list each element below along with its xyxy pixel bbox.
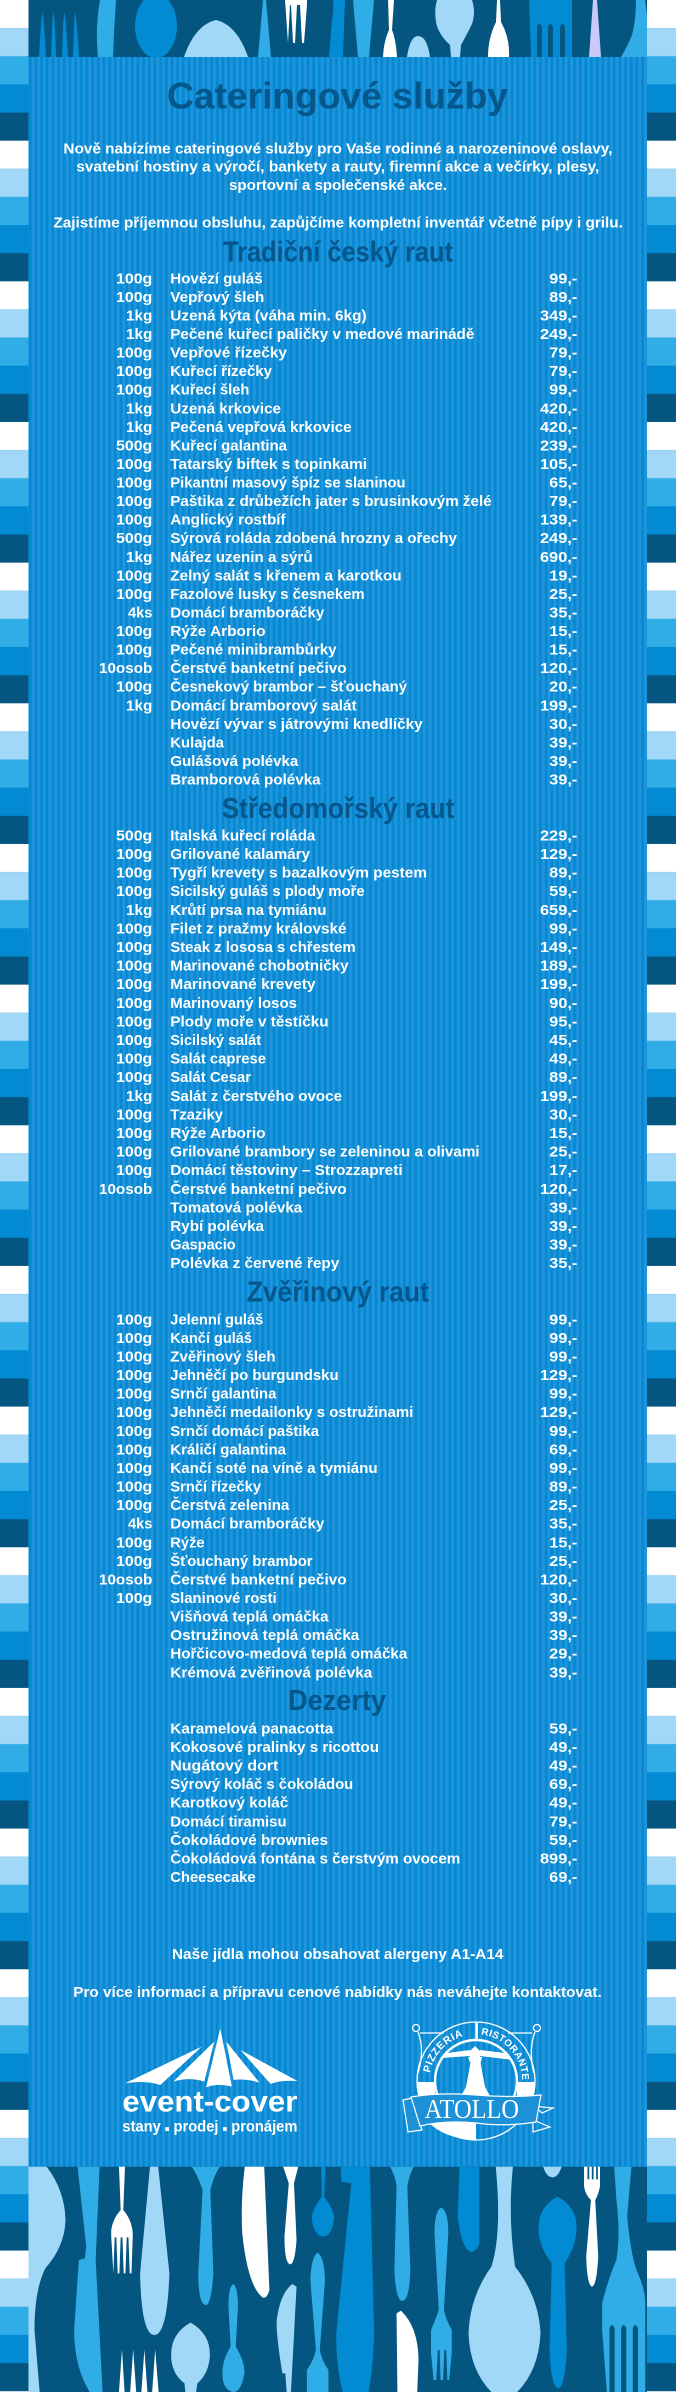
menu list: Zvěřinový raut: 25,-: [549, 1553, 577, 1570]
menu list: Tradiční český raut: Vepřové řízečky: [170, 345, 288, 362]
menu list: Tradiční český raut: 120,-: [540, 660, 577, 677]
menu list: Tradiční český raut: 1kg: [126, 419, 152, 436]
menu list: Dezerty: 49,-: [549, 1795, 577, 1812]
menu list: Zvěřinový raut: 129,-: [540, 1404, 577, 1421]
menu list: Zvěřinový raut: Krémová zvěřinová polévka: [170, 1664, 373, 1681]
menu list: Tradiční český raut: Sýrová roláda zdobená hrozny a ořechy: [170, 530, 458, 547]
menu list: Zvěřinový raut: 99,-: [549, 1311, 577, 1328]
menu list: Středomořský raut: Salát Cesar: [170, 1069, 251, 1086]
menu list: Tradiční český raut: 100g: [116, 679, 152, 696]
menu list: Středomořský raut: 149,-: [540, 939, 577, 956]
menu list: Tradiční český raut: [99, 270, 577, 789]
menu list: Středomořský raut: Filet z pražmy královské: [170, 920, 347, 937]
menu list: Středomořský raut: Salát caprese: [170, 1051, 266, 1068]
menu list: Zvěřinový raut: Jehněčí po burgundsku: [170, 1367, 339, 1384]
menu list: Středomořský raut: 659,-: [540, 902, 577, 919]
menu list: Středomořský raut: 100g: [116, 920, 152, 937]
menu list: Zvěřinový raut: 4ks: [128, 1516, 152, 1533]
menu list: Tradiční český raut: 105,-: [540, 456, 577, 473]
menu list: Tradiční český raut: 25,-: [549, 586, 577, 603]
menu list: Dezerty: 79,-: [549, 1813, 577, 1830]
menu list: Středomořský raut: Rýže Arborio: [170, 1125, 266, 1142]
menu list: Tradiční český raut: 100g: [116, 623, 152, 640]
menu list: Středomořský raut: Marinovaný losos: [170, 995, 297, 1012]
menu list: Středomořský raut: Tzaziky: [170, 1106, 224, 1123]
menu list: Středomořský raut: Steak z lososa s chřestem: [170, 939, 356, 956]
menu list: Zvěřinový raut: 99,-: [549, 1386, 577, 1403]
menu list: Tradiční český raut: 500g: [116, 437, 152, 454]
menu list: Zvěřinový raut: 15,-: [549, 1534, 577, 1551]
menu list: Středomořský raut: 199,-: [540, 976, 577, 993]
menu list: Tradiční český raut: 100g: [116, 586, 152, 603]
menu list: Tradiční český raut: 30,-: [549, 716, 577, 733]
menu list: Dezerty: 59,-: [549, 1832, 577, 1849]
menu list: Tradiční český raut: 79,-: [549, 493, 577, 510]
menu list: Zvěřinový raut: 35,-: [549, 1516, 577, 1533]
menu list: Středomořský raut: 229,-: [540, 827, 577, 844]
menu list: Tradiční český raut: 100g: [116, 493, 152, 510]
heading: Tradiční český raut: Tradiční český raut: [223, 237, 453, 269]
intro text: sportovní a společenské akce.: [229, 177, 447, 194]
menu list: Středomořský raut: 89,-: [549, 865, 577, 882]
allergen note: Naše jídla mohou obsahovat alergeny A1-A14: [172, 1946, 504, 1963]
menu list: Tradiční český raut: Vepřový šleh: [170, 289, 264, 306]
menu list: Tradiční český raut: 89,-: [549, 289, 577, 306]
menu list: Tradiční český raut: 249,-: [540, 530, 577, 547]
menu list: Středomořský raut: 100g: [116, 1125, 152, 1142]
menu list: Středomořský raut: 39,-: [549, 1218, 577, 1235]
menu list: Tradiční český raut: Domácí bramborový salát: [170, 697, 357, 714]
menu list: Středomořský raut: Grilované kalamáry: [170, 846, 311, 863]
menu list: Tradiční český raut: 15,-: [549, 642, 577, 659]
menu list: Zvěřinový raut: Srnčí řízečky: [170, 1478, 262, 1496]
menu list: Tradiční český raut: 20,-: [549, 679, 577, 696]
menu list: Tradiční český raut: 100g: [116, 289, 152, 306]
menu list: Tradiční český raut: 65,-: [549, 474, 577, 492]
menu list: Tradiční český raut: 239,-: [540, 437, 577, 454]
menu list: Tradiční český raut: 420,-: [540, 400, 577, 417]
menu list: Středomořský raut: 10osob: [99, 1181, 152, 1198]
menu list: Středomořský raut: Gaspacio: [170, 1237, 236, 1254]
right side stripes: [647, 0, 676, 2392]
logo: Atollo: ATOLLO: [425, 2094, 519, 2124]
menu list: Středomořský raut: 100g: [116, 865, 152, 882]
menu list: Dezerty: Domácí tiramisu: [170, 1813, 287, 1830]
contact note: Pro více informací a přípravu cenové nabídky nás neváhejte kontaktovat.: [73, 1984, 602, 2001]
menu list: Středomořský raut: 100g: [116, 846, 152, 863]
menu list: Tradiční český raut: Bramborová polévka: [170, 772, 321, 789]
menu list: Tradiční český raut: Zelný salát s křenem a karotkou: [170, 567, 402, 584]
menu list: Tradiční český raut: 99,-: [549, 382, 577, 399]
menu list: Středomořský raut: 1kg: [126, 902, 152, 919]
menu list: Zvěřinový raut: Kančí guláš: [170, 1330, 252, 1347]
menu list: Tradiční český raut: Domácí bramboráčky: [170, 604, 325, 622]
menu list: Středomořský raut: 99,-: [549, 920, 577, 937]
ring text: ristorante: [481, 2034, 522, 2086]
menu list: Tradiční český raut: 1kg: [126, 549, 152, 566]
menu list: Tradiční český raut: 100g: [116, 363, 152, 380]
menu list: Zvěřinový raut: Kančí soté na víně a tymiánu: [170, 1460, 378, 1477]
menu list: Zvěřinový raut: 100g: [116, 1460, 152, 1477]
menu list: Tradiční český raut: 39,-: [549, 753, 577, 770]
menu list: Tradiční český raut: 1kg: [126, 400, 152, 417]
menu list: Středomořský raut: 35,-: [549, 1255, 577, 1272]
menu list: Tradiční český raut: 420,-: [540, 419, 577, 436]
menu list: Tradiční český raut: 19,-: [549, 567, 577, 584]
menu list: Středomořský raut: 100g: [116, 1106, 152, 1123]
menu list: Zvěřinový raut: 100g: [116, 1534, 152, 1551]
menu list: Tradiční český raut: Fazolové lusky s česnekem: [170, 586, 365, 603]
menu list: Středomořský raut: 100g: [116, 1144, 152, 1161]
logo: event-cover: stany ■ prodej ■ pronájem: [122, 2119, 297, 2136]
menu list: Středomořský raut: 15,-: [549, 1125, 577, 1142]
menu list: Dezerty: Sýrový koláč s čokoládou: [170, 1776, 353, 1793]
left side stripes: [0, 0, 28, 2392]
menu list: Středomořský raut: Italská kuřecí roláda: [170, 827, 316, 844]
menu list: Tradiční český raut: Kulajda: [170, 734, 225, 751]
menu list: Středomořský raut: 100g: [116, 883, 152, 900]
menu list: Středomořský raut: Sicilský salát: [170, 1032, 261, 1049]
menu list: Tradiční český raut: 4ks: [128, 604, 152, 622]
menu list: Zvěřinový raut: 100g: [116, 1497, 152, 1514]
menu list: Zvěřinový raut: Čerstvá zelenina: [170, 1496, 290, 1514]
menu list: Tradiční český raut: Čerstvé banketní pečivo: [170, 659, 347, 677]
menu list: Zvěřinový raut: Srnčí galantina: [170, 1386, 277, 1403]
menu list: Zvěřinový raut: Domácí bramboráčky: [170, 1516, 325, 1533]
bottom cutlery band: [28, 2167, 647, 2392]
menu list: Středomořský raut: 100g: [116, 1069, 152, 1086]
menu list: Tradiční český raut: Uzená krkovice: [170, 400, 281, 417]
menu list: Středomořský raut: 25,-: [549, 1144, 577, 1161]
menu list: Středomořský raut: 17,-: [549, 1162, 577, 1179]
menu list: Zvěřinový raut: 39,-: [549, 1627, 577, 1644]
menu list: Tradiční český raut: 100g: [116, 512, 152, 529]
menu list: Tradiční český raut: 139,-: [540, 512, 577, 529]
menu list: Středomořský raut: 59,-: [549, 883, 577, 900]
menu list: Dezerty: 69,-: [549, 1869, 577, 1886]
menu list: Dezerty: [170, 1720, 577, 1886]
menu list: Zvěřinový raut: 100g: [116, 1478, 152, 1496]
menu list: Středomořský raut: 100g: [116, 1162, 152, 1179]
menu list: Středomořský raut: 39,-: [549, 1199, 577, 1216]
menu list: Středomořský raut: 100g: [116, 939, 152, 956]
menu list: Tradiční český raut: Uzená kýta (váha min. 6kg): [170, 307, 367, 324]
menu list: Středomořský raut: 100g: [116, 1032, 152, 1049]
menu list: Zvěřinový raut: 99,-: [549, 1348, 577, 1366]
menu list: Zvěřinový raut: 25,-: [549, 1497, 577, 1514]
menu list: Zvěřinový raut: Srnčí domácí paštika: [170, 1423, 320, 1440]
menu list: Tradiční český raut: 100g: [116, 567, 152, 584]
menu list: Zvěřinový raut: Šťouchaný brambor: [170, 1552, 313, 1570]
menu list: Tradiční český raut: Paštika z drůbežích jater s brusinkovým želé: [170, 493, 492, 510]
menu list: Zvěřinový raut: 100g: [116, 1330, 152, 1347]
menu list: Středomořský raut: Grilované brambory se zeleninou a olivami: [170, 1144, 480, 1161]
menu list: Tradiční český raut: 39,-: [549, 772, 577, 789]
menu list: Zvěřinový raut: 99,-: [549, 1460, 577, 1477]
menu list: Tradiční český raut: Pečená vepřová krkovice: [170, 419, 352, 436]
menu list: Tradiční český raut: 79,-: [549, 363, 577, 380]
menu list: Středomořský raut: Salát z čerstvého ovoce: [170, 1088, 342, 1105]
menu list: Tradiční český raut: 100g: [116, 474, 152, 492]
menu list: Dezerty: Kokosové pralinky s ricottou: [170, 1739, 379, 1756]
menu list: Dezerty: Nugátový dort: [170, 1758, 278, 1774]
intro text: svatební hostiny a výročí, bankety a rauty, firemní akce a večírky, plesy,: [76, 158, 599, 176]
menu list: Tradiční český raut: 79,-: [549, 345, 577, 362]
menu list: Středomořský raut: 90,-: [549, 995, 577, 1012]
menu list: Zvěřinový raut: 39,-: [549, 1609, 577, 1626]
menu list: Středomořský raut: 500g: [116, 827, 152, 844]
menu list: Tradiční český raut: Kuřecí galantina: [170, 437, 288, 454]
menu list: Tradiční český raut: 99,-: [549, 270, 577, 287]
menu list: Středomořský raut: Rybí polévka: [170, 1218, 265, 1235]
menu list: Středomořský raut: 129,-: [540, 846, 577, 863]
menu list: Tradiční český raut: Rýže Arborio: [170, 623, 266, 640]
menu list: Tradiční český raut: 349,-: [540, 307, 577, 324]
menu list: Tradiční český raut: Pikantní masový špíz se slaninou: [170, 474, 406, 492]
menu list: Středomořský raut: Čerstvé banketní pečivo: [170, 1180, 347, 1198]
menu list: Zvěřinový raut: 29,-: [549, 1646, 577, 1663]
menu list: Zvěřinový raut: Hořčicovo-medová teplá omáčka: [170, 1646, 408, 1663]
menu list: Dezerty: 49,-: [549, 1739, 577, 1756]
menu list: Tradiční český raut: Kuřecí šleh: [170, 382, 249, 399]
menu list: Tradiční český raut: 1kg: [126, 326, 152, 343]
menu list: Zvěřinový raut: 129,-: [540, 1367, 577, 1384]
menu list: Tradiční český raut: 15,-: [549, 623, 577, 640]
menu list: Středomořský raut: Marinované krevety: [170, 976, 316, 993]
heading: Dezerty: Dezerty: [288, 1685, 386, 1717]
menu list: Tradiční český raut: 10osob: [99, 660, 152, 677]
logo: Atollo: PIZZERIA: [423, 2030, 463, 2072]
menu list: Tradiční český raut: 100g: [116, 456, 152, 473]
menu list: Středomořský raut: [99, 827, 577, 1272]
menu list: Středomořský raut: 89,-: [549, 1069, 577, 1086]
menu list: Zvěřinový raut: 10osob: [99, 1571, 152, 1588]
menu list: Středomořský raut: Domácí těstoviny – Strozzapreti: [170, 1162, 403, 1179]
menu list: Dezerty: Čokoládová fontána s čerstvým ovocem: [170, 1850, 460, 1868]
menu list: Zvěřinový raut: 100g: [116, 1367, 152, 1384]
menu list: Zvěřinový raut: 99,-: [549, 1423, 577, 1440]
menu list: Zvěřinový raut: 30,-: [549, 1590, 577, 1607]
menu list: Tradiční český raut: Česnekový brambor – šťouchaný: [170, 678, 408, 696]
menu list: Tradiční český raut: 690,-: [540, 549, 577, 566]
menu list: Středomořský raut: 100g: [116, 1051, 152, 1068]
menu list: Zvěřinový raut: Ostružinová teplá omáčka: [170, 1627, 360, 1644]
icon: canopy: [125, 2028, 297, 2087]
menu list: Zvěřinový raut: 89,-: [549, 1478, 577, 1496]
menu list: Středomořský raut: 120,-: [540, 1181, 577, 1198]
intro text: [53, 140, 623, 231]
menu list: Dezerty: 69,-: [549, 1776, 577, 1793]
intro text: Nově nabízíme cateringové služby pro Vaše rodinné a narozeninové oslavy,: [63, 140, 612, 157]
heading: Zvěřinový raut: Zvěřinový raut: [247, 1277, 429, 1309]
menu list: Tradiční český raut: 100g: [116, 345, 152, 362]
intro text: Zajistíme příjemnou obsluhu, zapůjčíme kompletní inventář včetně pípy i grilu.: [53, 214, 623, 231]
menu list: Středomořský raut: 189,-: [540, 958, 577, 975]
menu list: Zvěřinový raut: 100g: [116, 1423, 152, 1440]
menu list: Tradiční český raut: 100g: [116, 270, 152, 287]
menu list: Středomořský raut: 100g: [116, 958, 152, 975]
menu list: Dezerty: Karamelová panacotta: [170, 1720, 334, 1737]
menu list: Tradiční český raut: Hovězí vývar s játrovými knedlíčky: [170, 716, 423, 733]
menu list: Dezerty: Cheesecake: [170, 1869, 256, 1886]
menu list: Dezerty: 49,-: [549, 1758, 577, 1774]
menu list: Zvěřinový raut: 100g: [116, 1441, 152, 1458]
logo: event-cover: [122, 2028, 298, 2136]
menu list: Dezerty: Karotkový koláč: [170, 1795, 288, 1812]
top cutlery band: [28, 0, 647, 58]
menu list: Zvěřinový raut: 120,-: [540, 1571, 577, 1588]
menu list: Zvěřinový raut: 100g: [116, 1590, 152, 1607]
menu list: Tradiční český raut: Kuřecí řízečky: [170, 363, 273, 380]
menu list: Tradiční český raut: 35,-: [549, 604, 577, 622]
menu list: Zvěřinový raut: 69,-: [549, 1441, 577, 1458]
logo: Atollo: RISTORANTE: [482, 2028, 530, 2080]
menu list: Středomořský raut: Tomatová polévka: [170, 1199, 303, 1216]
menu list: Zvěřinový raut: Čerstvé banketní pečivo: [170, 1570, 347, 1588]
menu list: Tradiční český raut: Hovězí guláš: [170, 270, 263, 287]
menu list: Středomořský raut: 39,-: [549, 1237, 577, 1254]
icon: lighthouse: [441, 2046, 513, 2096]
menu list: Tradiční český raut: Anglický rostbíf: [170, 512, 287, 529]
menu list: Zvěřinový raut: 39,-: [549, 1664, 577, 1681]
menu list: Tradiční český raut: 500g: [116, 530, 152, 547]
menu list: Zvěřinový raut: Rýže: [170, 1534, 205, 1551]
menu list: Tradiční český raut: 100g: [116, 642, 152, 659]
menu list: Tradiční český raut: 1kg: [126, 307, 152, 324]
menu list: Středomořský raut: Marinované chobotničky: [170, 958, 349, 975]
menu list: Tradiční český raut: 100g: [116, 382, 152, 399]
menu list: Zvěřinový raut: 100g: [116, 1404, 152, 1421]
menu list: Středomořský raut: 1kg: [126, 1088, 152, 1105]
menu list: Dezerty: 59,-: [549, 1720, 577, 1737]
menu list: Středomořský raut: 95,-: [549, 1013, 577, 1030]
menu list: Zvěřinový raut: Slaninové rosti: [170, 1590, 277, 1607]
menu list: Zvěřinový raut: Jelenní guláš: [170, 1311, 263, 1328]
menu list: Tradiční český raut: Pečené kuřecí paličky v medové marinádě: [170, 326, 474, 343]
logo: event-cover: event-cover: [122, 2086, 298, 2119]
menu list: Středomořský raut: Krůtí prsa na tymiánu: [170, 902, 327, 919]
heading: Středomořský raut: Středomořský raut: [222, 793, 455, 825]
menu list: Zvěřinový raut: Jehněčí medailonky s ostružinami: [170, 1404, 413, 1421]
banner ribbon: [403, 2094, 553, 2132]
menu list: Zvěřinový raut: 100g: [116, 1386, 152, 1403]
menu list: Tradiční český raut: 39,-: [549, 734, 577, 751]
menu list: Tradiční český raut: Gulášová polévka: [170, 753, 299, 770]
title: Cateringové služby: [167, 75, 508, 116]
menu list: Středomořský raut: 100g: [116, 976, 152, 993]
menu list: Středomořský raut: 199,-: [540, 1088, 577, 1105]
menu list: Zvěřinový raut: 100g: [116, 1311, 152, 1328]
menu list: Dezerty: 899,-: [540, 1850, 577, 1868]
menu list: Tradiční český raut: 199,-: [540, 697, 577, 714]
menu list: Tradiční český raut: 1kg: [126, 697, 152, 714]
menu list: Zvěřinový raut: 100g: [116, 1348, 152, 1366]
menu list: Středomořský raut: 100g: [116, 995, 152, 1012]
menu list: Středomořský raut: Tygří krevety s bazalkovým pestem: [170, 865, 427, 882]
menu list: Středomořský raut: Polévka z červené řepy: [170, 1255, 340, 1272]
menu list: Středomořský raut: 30,-: [549, 1106, 577, 1123]
menu list: Tradiční český raut: Nářez uzenin a sýrů: [170, 549, 313, 566]
menu list: Středomořský raut: 100g: [116, 1013, 152, 1030]
menu list: Tradiční český raut: 249,-: [540, 326, 577, 343]
menu list: Středomořský raut: 45,-: [549, 1032, 577, 1049]
menu list: Středomořský raut: Sicilský guláš s plody moře: [170, 883, 365, 900]
menu list: Zvěřinový raut: Višňová teplá omáčka: [170, 1609, 329, 1626]
logo: Atollo: [402, 2021, 556, 2141]
menu list: Zvěřinový raut: 100g: [116, 1553, 152, 1570]
menu list: Dezerty: Čokoládové brownies: [170, 1831, 328, 1849]
menu list: Zvěřinový raut: Zvěřinový šleh: [170, 1348, 276, 1366]
ring text: pizzeria: [430, 2034, 474, 2073]
menu list: Zvěřinový raut: Králičí galantina: [170, 1441, 287, 1458]
menu list: Středomořský raut: 49,-: [549, 1051, 577, 1068]
menu list: Středomořský raut: Plody moře v těstíčku: [170, 1013, 329, 1030]
menu list: Tradiční český raut: Pečené minibrambůrky: [170, 642, 337, 659]
menu list: Tradiční český raut: Tatarský biftek s topinkami: [170, 456, 367, 473]
menu list: Zvěřinový raut: 99,-: [549, 1330, 577, 1347]
menu list: Zvěřinový raut: [99, 1311, 577, 1681]
